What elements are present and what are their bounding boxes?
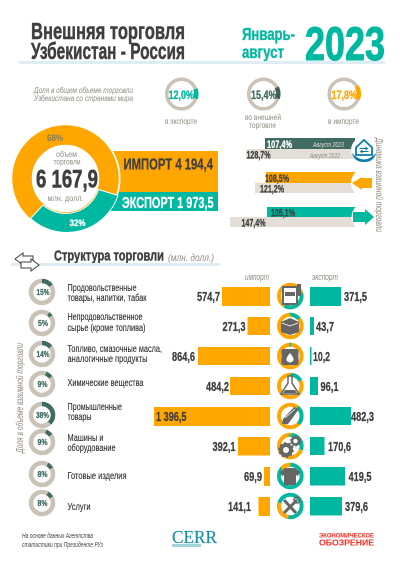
row 5: industrial goods: 482,3 xyxy=(351,410,374,424)
ring: import share xyxy=(324,74,364,126)
source note: статистики при Президенте РУз xyxy=(22,540,103,549)
row 7: finished goods: 8% xyxy=(38,469,48,479)
source note xyxy=(22,531,103,549)
vertical caption: share: Доля в объеме взаимной торговли xyxy=(14,343,26,454)
row 6: machinery: 9% xyxy=(38,437,48,447)
row 8: services: 8% xyxy=(38,498,48,508)
export bar xyxy=(108,192,218,212)
row 4: chemicals: Химические вещества xyxy=(68,378,144,389)
donut chart: торговли xyxy=(54,156,81,166)
donut chart: 32% xyxy=(70,218,86,228)
row 2: raw materials: сырье (кроме топлива) xyxy=(68,323,146,334)
logo: Economic Review: ЭКОНОМИЧЕСКОЕ xyxy=(319,534,374,540)
row 3: fuel: аналогичные продукты xyxy=(68,354,148,365)
dynamics: export: 105,1% xyxy=(271,208,295,220)
donut chart: объем xyxy=(56,149,77,159)
row 3: fuel: 10,2 xyxy=(313,350,330,364)
row 1: food xyxy=(31,281,367,310)
icon: import arrow xyxy=(352,177,372,190)
dynamics: import xyxy=(255,168,381,198)
row 2: raw materials: Непродовольственное xyxy=(68,312,143,323)
row 7: finished goods: 69,9 xyxy=(244,470,262,484)
row 5: industrial goods: 38% xyxy=(36,410,49,420)
donut chart xyxy=(10,124,120,234)
title: Узбекистан - Россия xyxy=(31,38,185,64)
ring: import share: в импорте xyxy=(328,116,359,126)
section heading: (млн. долл.) xyxy=(168,253,214,264)
row 4: chemicals: 96,1 xyxy=(320,380,339,394)
icon: export arrow xyxy=(353,209,374,225)
row 4: chemicals: 9% xyxy=(38,379,48,389)
share caption: Узбекистана со странами мира xyxy=(33,93,133,103)
title xyxy=(31,18,185,64)
dynamics: total trade: Август 2023 xyxy=(312,140,345,149)
ring: foreign trade share: торговле xyxy=(249,120,276,130)
row 7: finished goods: Готовые изделия xyxy=(68,471,126,482)
title: Внешняя торговля xyxy=(31,18,185,44)
row 7: finished goods xyxy=(27,459,372,492)
row 1: food: 15% xyxy=(36,287,50,297)
row 1: food: товары, напитки, табак xyxy=(68,292,147,304)
row 7: finished goods: 419,5 xyxy=(348,470,372,484)
row 4: chemicals xyxy=(28,370,339,398)
ring: export share: в экспорте xyxy=(165,116,197,126)
column labels: импорт xyxy=(245,272,269,282)
row 1: food: 371,5 xyxy=(344,290,367,304)
row 3: fuel: 864,6 xyxy=(172,350,195,364)
donut chart: 68% xyxy=(47,133,63,143)
share caption xyxy=(33,85,133,103)
column labels xyxy=(245,272,338,282)
export bar: ЭКСПОРТ 1 973,5 xyxy=(122,195,214,212)
row 6: machinery: оборудование xyxy=(68,442,116,454)
vertical caption: dynamics: Динамика взаимной торговли xyxy=(373,137,384,232)
row 5: industrial goods: 1 396,5 xyxy=(156,410,187,424)
ring: export share: 12,0% xyxy=(168,88,194,102)
share caption: Доля в общем объеме торговли xyxy=(33,85,133,95)
ring: export share xyxy=(163,75,200,126)
ring: foreign trade share: 15,4% xyxy=(251,88,277,102)
logo: Economic Review: ОБОЗРЕНИЕ xyxy=(319,538,374,548)
icon: trade house xyxy=(351,137,377,163)
column labels: экспорт xyxy=(312,272,338,282)
import bar xyxy=(112,151,218,192)
dynamics: total trade xyxy=(246,138,355,162)
row 2: raw materials: 43,7 xyxy=(316,320,334,334)
logo: Economic Review xyxy=(319,534,374,548)
source note: На основе данных Агентства xyxy=(22,531,93,540)
row 3: fuel: Топливо, смазочные масла, xyxy=(68,344,162,355)
logo: CERR: CERR xyxy=(172,527,217,547)
row 8: services: 141,1 xyxy=(228,500,251,514)
row 2: raw materials: 5% xyxy=(38,318,48,328)
dynamics: import: 108,5% xyxy=(265,173,289,185)
section heading: Структура торговли xyxy=(54,248,164,264)
row 8: services: Услуги xyxy=(68,502,90,513)
donut chart: 6 167,9 xyxy=(36,166,98,194)
dynamics: total trade: 107,4% xyxy=(267,139,292,151)
donut chart: млн. долл. xyxy=(48,193,84,203)
row 6: machinery xyxy=(28,428,351,457)
row 8: services: 379,6 xyxy=(345,500,368,514)
row 2: raw materials: 271,3 xyxy=(222,320,246,334)
row 5: industrial goods: Промышленные xyxy=(68,402,122,413)
dynamics: export: 147,4% xyxy=(242,218,266,230)
dynamics: import: 121,2% xyxy=(260,184,284,196)
row 6: machinery: 170,6 xyxy=(328,440,351,454)
period label xyxy=(242,24,295,62)
period label: август xyxy=(242,42,284,62)
period label: Январь- xyxy=(242,24,295,44)
row 4: chemicals: 484,2 xyxy=(206,380,229,394)
row 6: machinery: Машины и xyxy=(68,433,104,444)
row 1: food: Продовольственные xyxy=(68,283,137,294)
dynamics: export xyxy=(230,202,380,232)
ring: import share: 17,8% xyxy=(332,88,357,102)
row 3: fuel: 14% xyxy=(36,349,50,359)
row 1: food: 574,7 xyxy=(197,290,220,304)
row 6: machinery: 392,1 xyxy=(212,440,236,454)
row 2: raw materials xyxy=(27,308,334,338)
row 8: services xyxy=(27,488,368,519)
dynamics: total trade: Август 2022 xyxy=(309,151,341,160)
ring: foreign trade share xyxy=(244,74,283,130)
import bar: ИМПОРТ 4 194,4 xyxy=(124,156,213,174)
ring: foreign trade share: во внешней xyxy=(245,112,281,122)
row 5: industrial goods: товары xyxy=(68,412,92,423)
dynamics: total trade: 128,7% xyxy=(246,150,271,162)
icon: exchange arrows xyxy=(15,253,39,271)
row 5: industrial goods xyxy=(31,400,374,432)
row 3: fuel xyxy=(31,343,330,368)
